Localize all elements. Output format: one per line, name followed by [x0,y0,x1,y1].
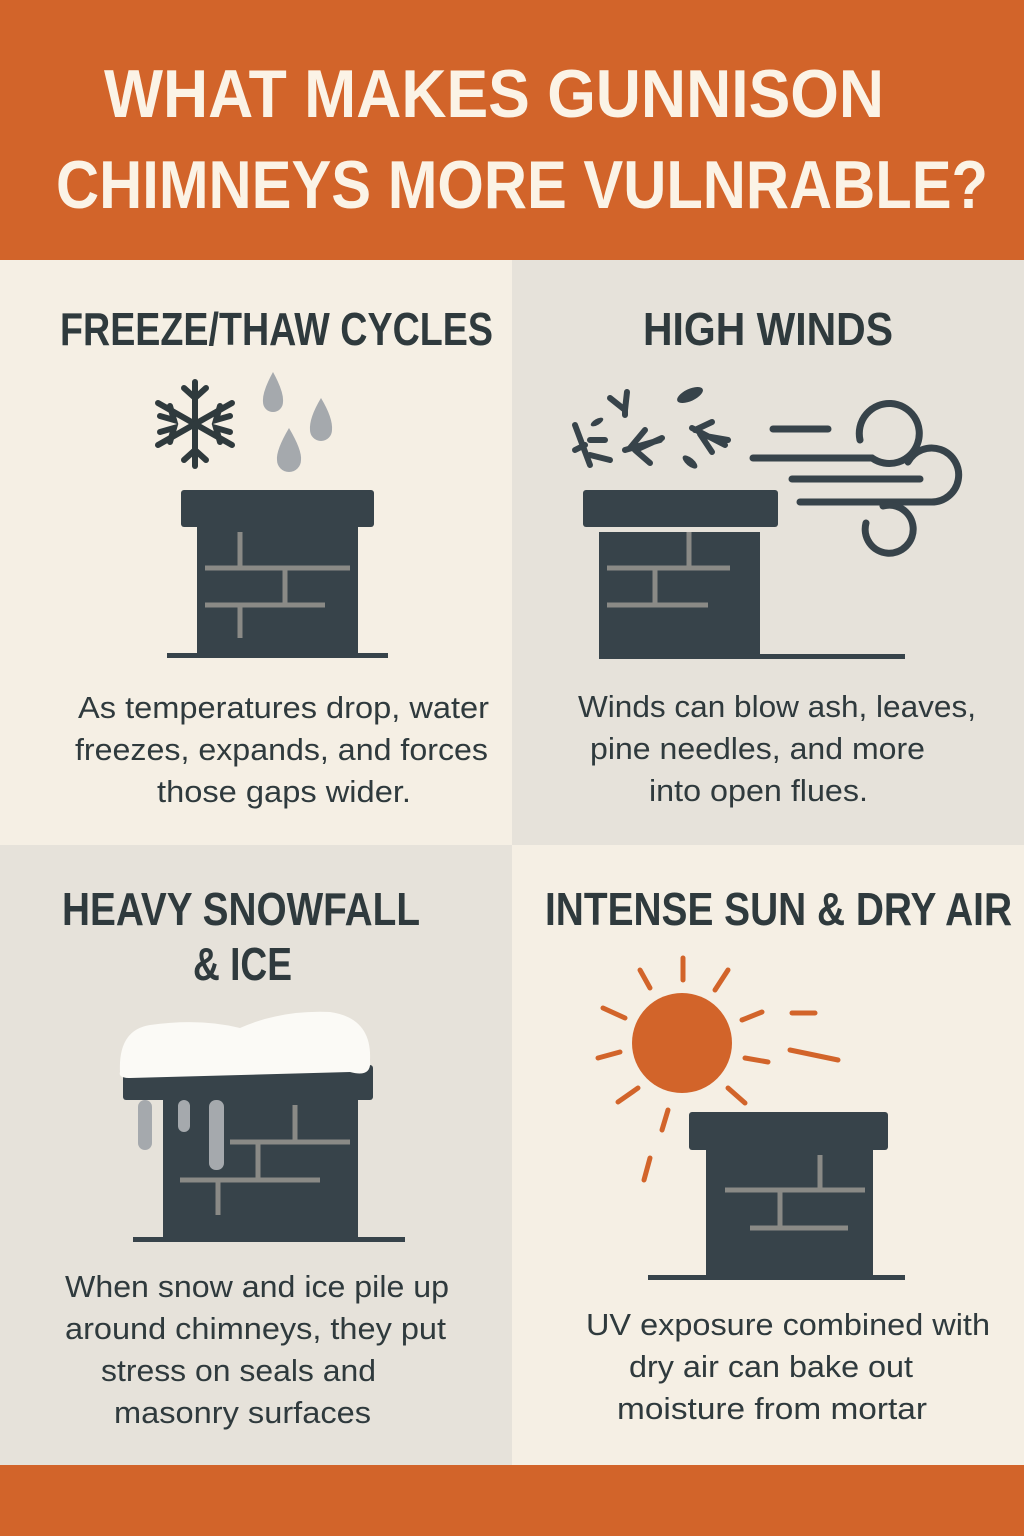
text: freeze/thaw body: As temperatures drop, water [78,690,489,725]
text: high winds body [578,689,976,808]
text: snowfall body: masonry surfaces [114,1395,371,1430]
icon: wind [753,403,959,553]
text: snowfall body [65,1269,449,1430]
panel: intense sun [512,845,1024,1465]
heading: freeze/thaw: FREEZE/THAW CYCLES [60,303,493,355]
text: snowfall body: When snow and ice pile up [65,1269,449,1304]
panel: heavy snowfall [0,845,512,1465]
text: high winds body: into open flues. [649,773,868,808]
icon: water drops [263,372,332,472]
title: WHAT MAKES GUNNISON [104,56,884,132]
icon: chimney [648,1112,905,1280]
icon: sun [598,958,838,1180]
text: sun body: dry air can bake out [629,1349,913,1384]
icon: snowy chimney [120,1012,405,1242]
text: snowfall body: stress on seals and [101,1353,376,1388]
heading: heavy snowfall [62,883,420,990]
icon: chimney [583,490,905,659]
panel: freeze/thaw [0,260,512,845]
heading: heavy snowfall: HEAVY SNOWFALL [62,883,420,935]
header band [0,0,1024,260]
icon: leaves [575,384,728,471]
heading: high winds: HIGH WINDS [643,303,893,355]
icon: chimney [167,490,388,658]
text: sun body: moisture from mortar [617,1391,927,1426]
text: high winds body: Winds can blow ash, leaves, [578,689,976,724]
text: sun body: UV exposure combined with [586,1307,990,1342]
panel: high winds [512,260,1024,845]
text: sun body [586,1307,990,1426]
icon: snowflake [158,382,232,466]
heading: heavy snowfall: & ICE [193,938,292,990]
text: freeze/thaw body [75,690,489,809]
text: freeze/thaw body: those gaps wider. [157,774,411,809]
text: snowfall body: around chimneys, they put [65,1311,446,1346]
text: high winds body: pine needles, and more [590,731,925,766]
title [56,56,988,223]
text: freeze/thaw body: freezes, expands, and forces [75,732,488,767]
footer band [0,1465,1024,1536]
